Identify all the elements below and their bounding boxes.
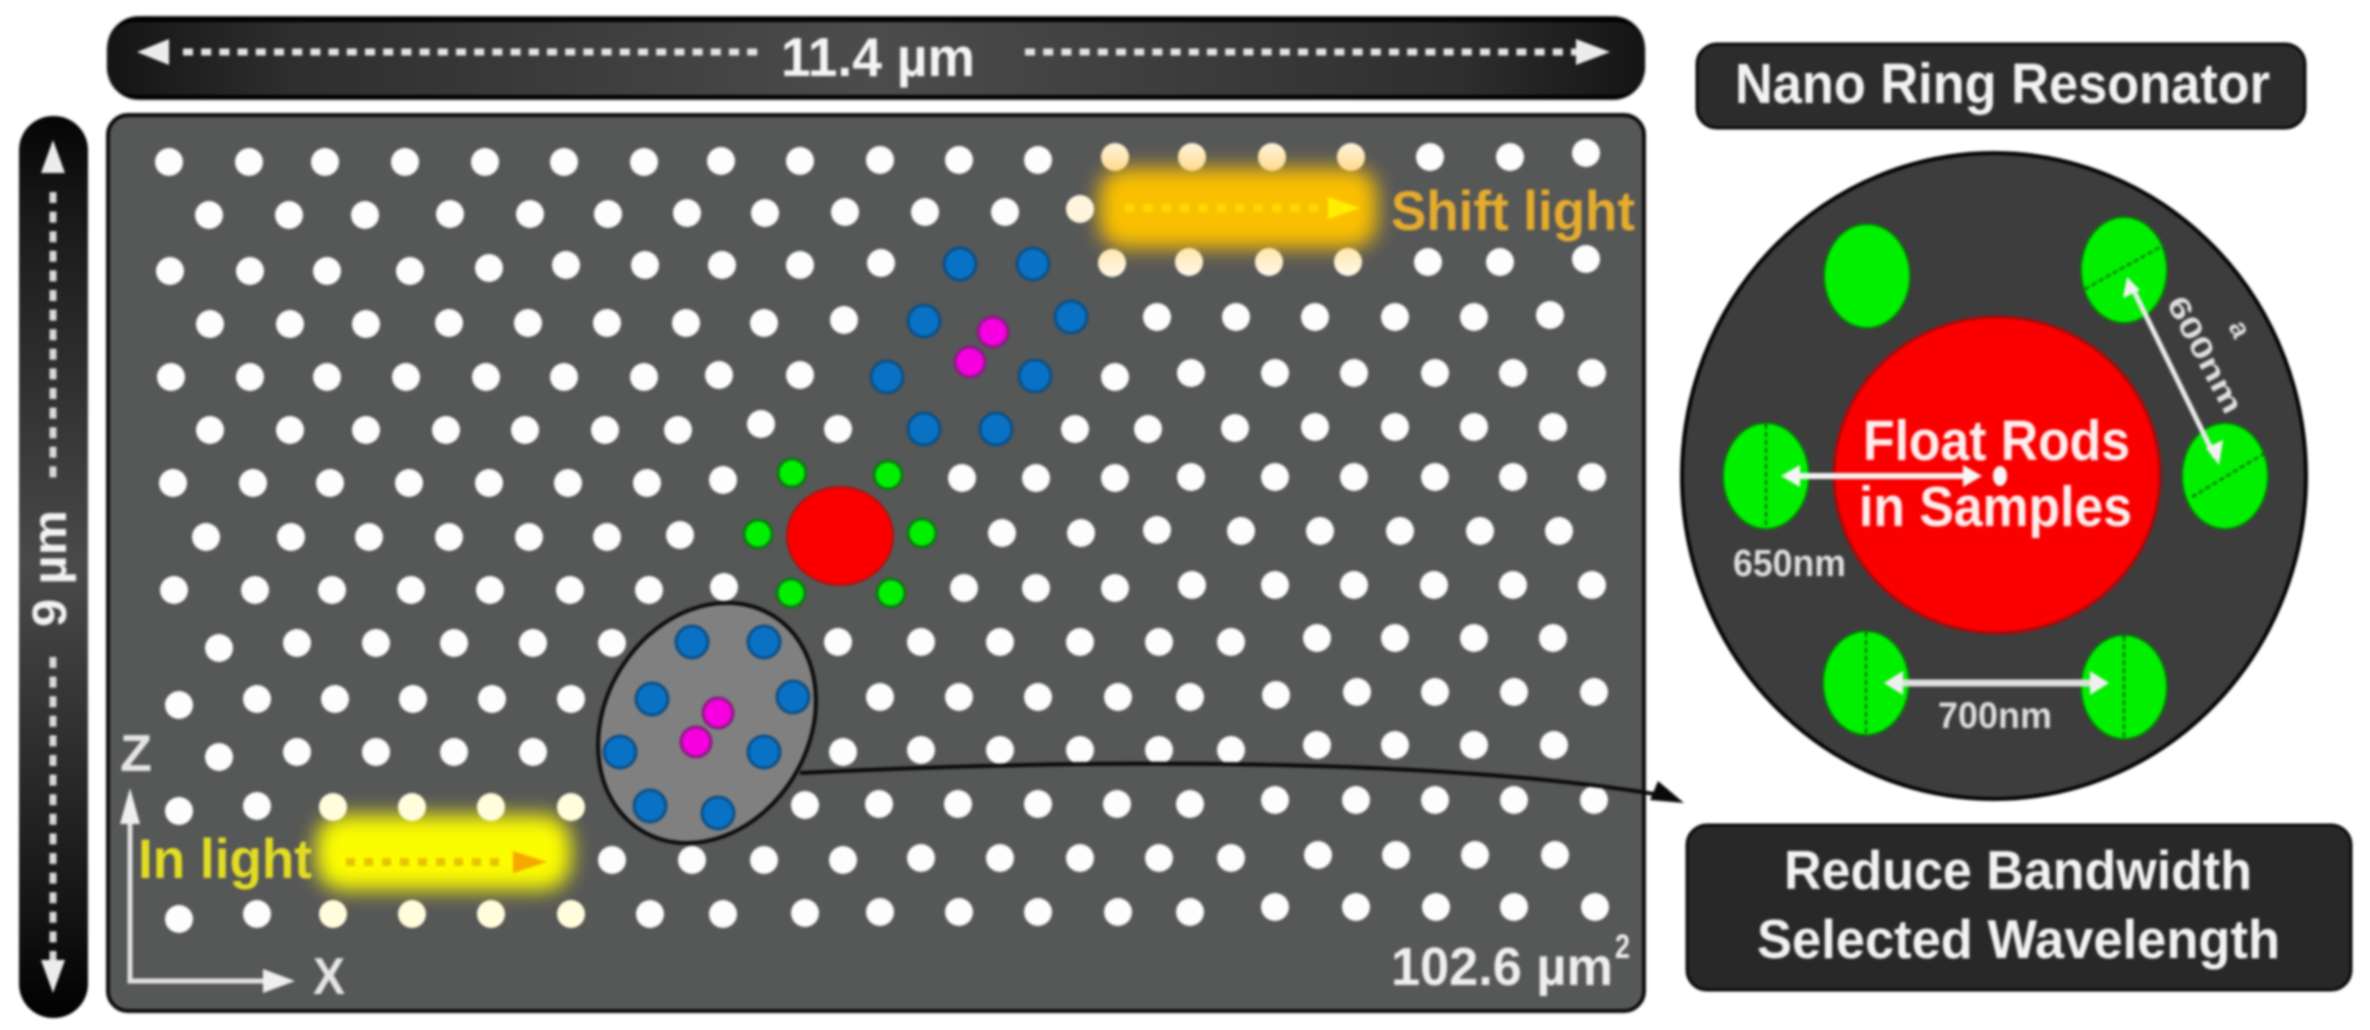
height bar: 9 µm: [19, 116, 88, 1018]
arrow: from ellipse to bandwidth box: [800, 764, 1684, 803]
callout: reduce bandwidth selected wavelength: Reduce Bandwidth: [1784, 839, 2252, 901]
label: 600nm: 600nm: [2160, 291, 2249, 419]
label: a: a: [2223, 315, 2257, 343]
label: area 102.6 µm²: 2: [1615, 928, 1630, 966]
white lattice rods: [155, 139, 1609, 933]
arrow: height dimension down: [41, 657, 65, 993]
upper defect: blue and magenta rods: [871, 248, 1087, 445]
axis label X: X: [313, 948, 345, 1006]
label: 700nm: 700nm: [1938, 695, 2052, 736]
width label: 11.4 µm: [781, 26, 975, 88]
arrow: in light direction: [346, 851, 547, 873]
arrow: 600nm spacing: [2123, 277, 2223, 465]
label: in light: In light: [138, 827, 312, 890]
label: shift light: Shift light: [1391, 179, 1635, 242]
rod centre dashed lines: [1766, 246, 2265, 738]
arrow: width dimension left: [137, 39, 762, 65]
glow: in light channel: [316, 815, 571, 890]
red central rod: [1834, 317, 2160, 633]
arrow: shift light direction: [1125, 197, 1360, 219]
arrow: 700nm spacing: [1884, 671, 2109, 695]
label: float rods in samples: [1859, 409, 2132, 539]
arrow: 650nm spacing: [1781, 465, 2007, 487]
green ring rods: [1723, 217, 2268, 739]
width bar: 11.4 µm: [107, 16, 1645, 100]
axes: X and Z: [120, 725, 345, 1006]
label: area 102.6 µm²: 102.6 µm: [1391, 937, 1613, 997]
lower defect: highlighted ellipse: [555, 562, 859, 884]
orange-tinted rods around shift light: [1066, 143, 1365, 277]
label: 650nm: 650nm: [1733, 543, 1846, 585]
height label: 9 µm: [24, 510, 77, 627]
diagram: nano ring resonator: [1682, 153, 2306, 799]
callout: reduce bandwidth selected wavelength: [1687, 825, 2351, 990]
central ring resonator: red rod with green rods: [744, 459, 936, 607]
arrow: width dimension right: [1025, 39, 1610, 65]
panel: photonic crystal lattice: [108, 115, 1644, 1011]
callout: reduce bandwidth selected wavelength: Selected Wavelength: [1757, 908, 2280, 970]
axis label Z: Z: [120, 725, 152, 783]
heading: Nano Ring Resonator: Nano Ring Resonator: [1735, 52, 2270, 116]
glow: shift light channel: [1099, 168, 1377, 248]
label: float rods in samples: in Samples: [1859, 475, 2132, 539]
arrow: height dimension up: [41, 140, 65, 478]
yellow-tinted rods around in light: [319, 793, 585, 928]
label: float rods in samples: Float Rods: [1863, 409, 2130, 473]
